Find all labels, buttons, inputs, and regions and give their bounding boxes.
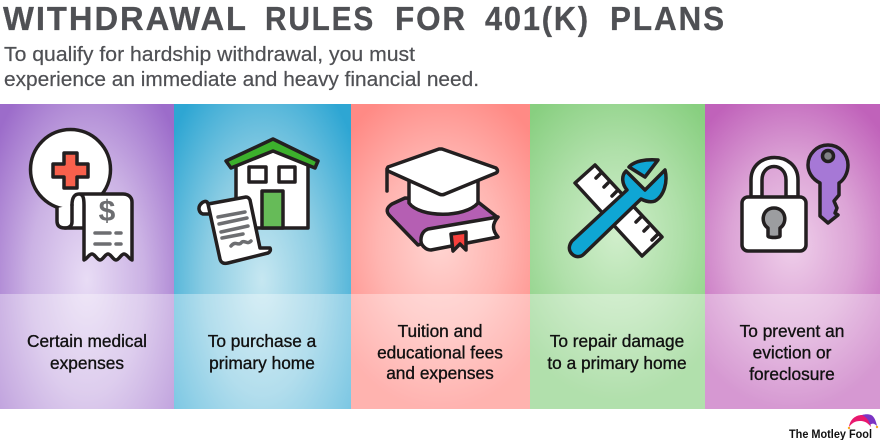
label: To prevent an [740,321,844,341]
label: Tuition and [398,321,482,341]
label [208,331,317,373]
title: RULES [265,0,375,37]
panel: repair [530,104,705,409]
label: Certain medical [27,331,147,351]
label: to a primary home [547,353,687,373]
label [547,331,687,373]
panel: eviction [705,104,880,409]
label: primary home [209,353,315,373]
subtitle: experience an immediate and heavy financial need. [4,69,479,91]
title: 401(K) [485,0,590,37]
label: and expenses [386,363,494,383]
subtitle: To qualify for hardship withdrawal, you must [4,44,415,66]
logo: The Motley Fool [789,414,878,440]
label: educational fees [377,342,503,362]
label [377,321,503,383]
label: eviction or [753,342,832,362]
icon: graduation cap and book [387,149,498,251]
subtitle [4,44,479,91]
icon: medical bill [30,130,132,260]
title: PLANS [610,0,726,37]
label: To repair damage [550,331,684,351]
icon: dollar sign: $ [99,195,116,228]
title [3,0,726,37]
label: To purchase a [208,331,317,351]
icon: ruler and wrench [569,160,666,257]
panel: education [351,104,530,409]
icon: padlock and key [742,145,848,251]
label [740,321,844,384]
icon: jester hat [848,414,878,429]
label: foreclosure [749,364,835,384]
panel: medical expenses [0,104,174,409]
label [27,331,147,373]
title: FOR [395,0,467,37]
title: WITHDRAWAL [3,0,248,37]
icon: house and deed [199,139,318,263]
label: expenses [50,353,124,373]
panel: primary home [174,104,351,409]
